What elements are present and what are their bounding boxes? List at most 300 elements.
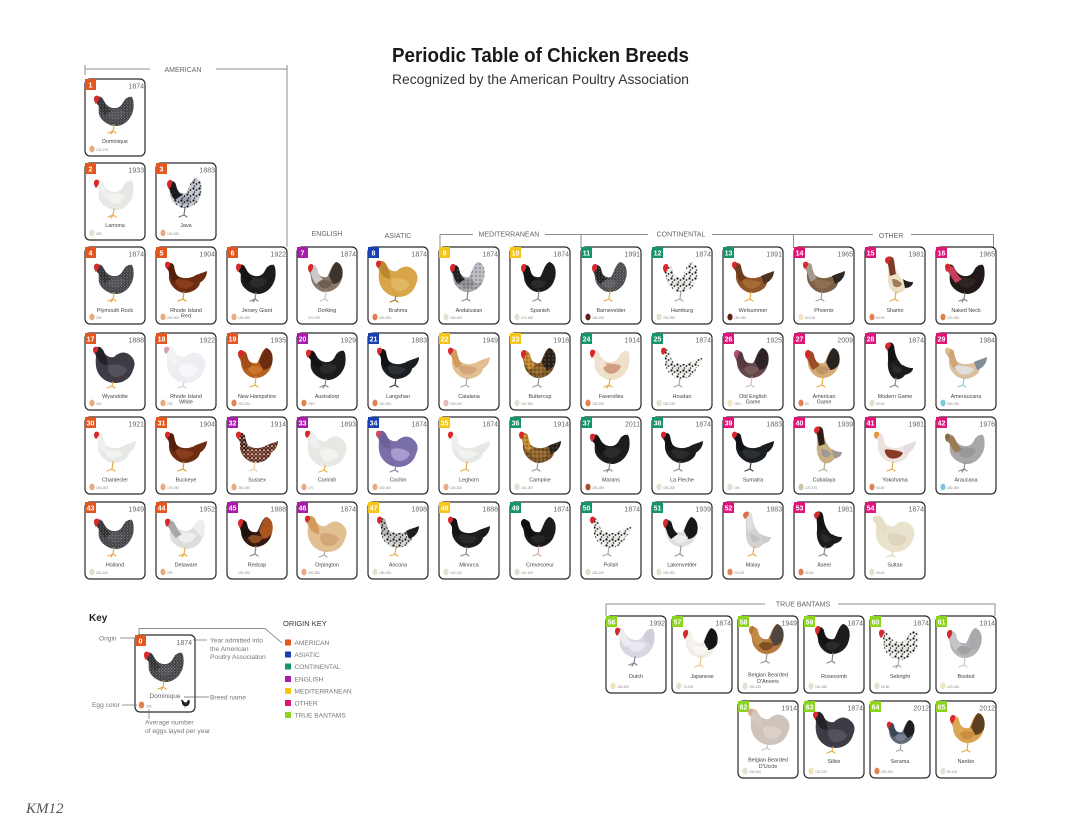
card: Rhode Island White: 18 [158,336,165,344]
card: Chantecler: 30 [87,420,94,428]
card: Wyandotte [85,333,145,410]
card: Australorp: Australorp [315,394,339,400]
card: Japanese: Japanese [690,674,714,680]
card: Malay [723,502,783,579]
egg: Araucana: 180-250 [947,486,959,490]
card: Sebright: Sebright [890,674,911,680]
card: Cornish: 33 [299,420,306,428]
key annotation: year admitted: the American [210,646,249,653]
egg: Spanish: 170-180 [521,316,533,320]
chicken: Langshan [377,348,419,387]
key annotation: breed name [184,694,246,702]
card: Ancona [368,502,428,579]
key annotation: average eggs [145,709,211,735]
card: Faverolles: 24 [583,336,590,344]
card: Lakenvelder: 51 [654,506,661,512]
card: Rhode Island White: White [179,400,193,406]
card: Jersey Giant [227,247,287,324]
key: sample card: Dominique [149,693,181,700]
chicken: Sebright [879,630,919,668]
chicken: Sumatra [732,432,774,471]
chicken: Modern Game [885,342,913,387]
card: La Fleche [652,417,712,494]
card: Modern Game: 1874 [908,338,924,344]
card: Rosecomb: 59 [806,620,813,626]
chicken: Sultan [873,516,915,557]
card: Langshan: 1883 [411,338,427,344]
origin key legend: AMERICAN [294,640,330,647]
chicken: Holland [94,519,134,557]
egg: Andalusian: 160-200 [450,316,462,320]
egg: Yokohama: 60-80 [876,486,885,490]
key annotation: average eggs: Average number [145,720,194,726]
chicken: Hamburg [663,262,698,301]
card: Redcap: 45 [229,506,236,512]
bracket: Mediterranean, Continental and Other: MEDITERRANEAN [479,232,539,238]
card: Campine: 1914 [553,422,569,428]
chicken: La Fleche [661,432,703,471]
egg: Marans: 150-200 [592,486,604,490]
egg: New Hampshire: 200-220 [238,402,250,406]
card: Dorking: 1874 [340,252,356,258]
egg: Sumatra: 100 [734,486,740,490]
chicken: Ancona [377,517,419,556]
card: Andalusian: Andalusian [456,308,482,314]
chicken: Dorking [308,262,343,301]
card: Booted: 61 [938,620,945,626]
chicken: Houdan [661,348,703,387]
egg: Leghorn: 150-320 [450,486,462,490]
egg: Modern Game: 50-80 [876,402,885,406]
egg: Sebright: 60-80 [881,685,890,689]
origin key legend: TRUE BANTAMS [294,712,346,720]
card: Sussex: Sussex [248,478,266,484]
egg: Welsummer: 160-250 [734,316,746,320]
egg: Chantecler: 150-200 [96,486,108,490]
chicken: Belgian Bearded D'Anvers [749,624,784,663]
card: Chantecler: Chantecler [102,478,128,484]
egg: Dorking: 170-190 [308,316,320,320]
origin key heading: ORIGIN KEY [283,619,327,628]
card: Japanese [672,616,732,693]
card: Cubalaya: 40 [796,420,803,428]
chicken: Buttercup [521,348,556,387]
card: Brahma: Brahma [389,308,407,314]
key annotation: egg color [92,702,137,709]
card: American Game [794,333,854,410]
chicken: Belgian Bearded D'Uccle [748,709,790,750]
card: Jersey Giant: 1922 [270,252,286,258]
card: Cubalaya [794,417,854,494]
card: Leghorn: 35 [441,420,448,428]
chicken: Leghorn [448,432,490,471]
origin key legend: MEDITERRANEAN [294,688,352,696]
egg: Rosecomb: 150-180 [815,685,827,689]
egg: Malay: 20-100 [734,571,744,575]
card: Ancona: Ancona [389,562,407,568]
card: Belgian Bearded D'Anvers: Belgian Bearded [748,672,788,678]
card: Serama [870,701,930,778]
key annotation: average eggs: of eggs layed per year [145,728,211,735]
card: La Fleche: 38 [654,420,661,428]
card: Wyandotte: 17 [87,336,94,344]
card: Catalana: Catalana [458,394,480,400]
icon: small chicken [181,700,190,708]
chicken: Marans [590,434,630,472]
card: Belgian Bearded D'Anvers: 58 [740,620,747,626]
card: Buttercup: 1918 [553,338,569,344]
card: Marans: 37 [583,420,590,428]
card: Ameraucana: Ameraucana [951,394,981,400]
card: Dutch: 56 [608,620,615,626]
card: Dorking: 7 [301,250,305,258]
card: Aseel: 53 [796,506,803,512]
card: Booted: 1914 [979,620,995,628]
card: Buckeye: 1904 [199,422,215,428]
card: Lakenvelder [652,502,712,579]
card: Belgian Bearded D'Anvers [738,616,798,693]
card: Yokohama: 41 [867,420,874,428]
card: Sebright [870,616,930,693]
card: Serama: 2012 [913,706,929,712]
card: Ameraucana: 1984 [979,338,995,344]
key annotation: origin [99,636,135,642]
card: Buckeye: 31 [158,420,165,428]
egg: Silkie: 100-120 [815,770,827,774]
card: Sultan [865,502,925,579]
key connector: origin to legend [139,628,282,643]
chicken: Lakenvelder [663,517,698,556]
key annotation: year admitted: Year admitted into [210,638,263,644]
chicken: Plymouth Rock [94,264,134,302]
chicken: Naked Neck [945,264,985,302]
egg: Naked Neck: 120-150 [947,316,959,320]
card: Marans: 2011 [625,422,640,428]
origin key legend: ASIATIC [294,652,320,659]
card: Rosecomb [804,616,864,693]
card: Silkie: Silkie [828,759,840,765]
card: Cochin: 1874 [411,422,427,428]
egg: Shamo: 80-90 [876,316,885,320]
card: Spanish: Spanish [530,308,550,314]
card: Leghorn: 1874 [482,422,498,428]
card: Andalusian: 9 [443,250,447,258]
egg: Aseel: 50-60 [805,571,814,575]
card: Sumatra: 39 [725,420,732,428]
card: Japanese: 1874 [715,620,731,628]
card: Phoenix: 1965 [837,252,853,258]
egg: Barnevelder: 180-200 [592,316,604,320]
chicken: Yokohama [874,432,916,471]
card: Belgian Bearded D'Uccle: 62 [740,704,747,712]
chicken: Welsummer [732,262,774,301]
egg: Cochin: 150-200 [379,486,391,490]
card: Chantecler: 1921 [128,422,144,428]
chicken: Silkie [813,712,855,753]
card: Shamo: 1981 [908,252,924,258]
bracket: True Bantams: TRUE BANTAMS [776,602,830,608]
card: Cornish: 1893 [340,422,356,428]
card: Ameraucana [936,333,996,410]
egg: Belgian Bearded D'Uccle: 100-200 [749,770,761,774]
card: Cubalaya: 1939 [837,422,853,428]
card: Sultan: Sultan [887,562,903,568]
card: Redcap: 1888 [270,506,286,514]
origin key legend: OTHER [294,700,318,708]
card: Marans: Marans [602,478,620,484]
card: Nankin: 2012 [979,706,995,712]
card: Phoenix: 14 [796,250,803,258]
card: Catalana: 22 [441,336,448,344]
key heading: Key [89,613,108,624]
card: Dutch: Dutch [629,674,643,680]
card: Modern Game: 28 [867,336,874,344]
card: Old English Game: 26 [725,336,732,344]
card: Ancona: 1898 [411,506,427,514]
card: Australorp: 1929 [340,338,356,344]
egg: American Game: 80 [805,402,809,406]
card: Crevecoeur: 1874 [553,506,569,514]
card: Serama: 64 [872,704,879,712]
card: American Game: 27 [796,336,803,344]
card: Delaware [156,502,216,579]
egg: Buckeye: 175-240 [167,486,179,490]
chicken: Spanish [521,262,556,301]
card: Nankin: Nankin [958,759,974,765]
card: Houdan [652,333,712,410]
egg: Cubalaya: 120-175 [805,486,817,490]
card: Araucana: Araucana [954,478,978,484]
card: Naked Neck: Naked Neck [951,308,981,314]
card: Dominique [85,79,145,156]
card: Japanese: 57 [674,620,681,626]
bracket: Mediterranean, Continental and Other: CONTINENTAL [657,232,706,238]
card: Cubalaya: Cubalaya [813,478,835,484]
subtitle: Recognized by the American Poultry Association [392,71,689,87]
egg: La Fleche: 150-200 [663,486,675,490]
card: Malay: 1883 [766,506,782,514]
chicken: Rosecomb [815,624,850,663]
card: Crevecoeur [510,502,570,579]
key annotation: year admitted [193,638,266,661]
card: Langshan [368,333,428,410]
egg: Cornish: 170 [308,486,314,490]
card: Belgian Bearded D'Uccle [738,701,798,778]
card: Delaware: 1952 [199,506,215,514]
card: Barnevelder: 1991 [624,252,640,258]
egg: Polish: 150-200 [592,571,604,575]
chicken: Dutch [615,628,655,666]
card: Nankin: 65 [938,704,945,712]
card: Rhode Island Red: 5 [160,250,164,258]
card: Aseel: 1981 [837,506,853,514]
card: Malay: Malay [746,562,760,568]
card: New Hampshire: New Hampshire [238,394,276,400]
card: Sussex: 32 [229,420,236,428]
card: Java: 1883 [199,168,215,174]
card: Plymouth Rock: Plymouth Rock [97,308,133,314]
egg: Dominique: 230-275 [96,148,108,152]
card: Buttercup [510,333,570,410]
card: Sultan: 1874 [908,506,924,514]
chicken: Minorca [448,517,490,556]
chicken: Araucana [945,434,985,472]
card: Wyandotte: 1888 [128,338,144,344]
egg: Brahma: 160-200 [379,316,391,320]
card: Marans [581,417,641,494]
egg: Belgian Bearded D'Anvers: 150-220 [749,685,761,689]
egg: Faverolles: 150-200 [592,402,604,406]
card: Rhode Island White: Rhode Island [170,394,202,400]
card: Belgian Bearded D'Uccle: D'Uccle [759,764,777,770]
card: Delaware: Delaware [175,562,197,568]
card: Cochin [368,417,428,494]
egg: Houdan: 150-230 [663,402,675,406]
card: Java [156,163,216,240]
card: Plymouth Rock: 1874 [128,252,144,258]
chicken: Wyandotte [93,347,135,388]
egg: Lakenvelder: 150-200 [663,571,675,575]
card: Holland: Holland [106,562,124,568]
card: Hamburg: 12 [654,250,661,258]
card: Plymouth Rock: 4 [89,250,93,258]
card: Polish [581,502,641,579]
card: Jersey Giant: 6 [231,250,235,258]
egg: Hamburg: 200-250 [663,316,675,320]
chicken: Australorp [306,350,346,388]
key: sample card: 1874 [176,640,192,647]
card: Cochin: 34 [370,420,377,428]
card: Orpington: Orpington [315,562,339,568]
chicken: Orpington [305,516,347,557]
egg: Buttercup: 140-180 [521,402,533,406]
egg: key sample: 200 [146,704,152,708]
bracket: American [85,65,287,247]
card: Spanish [510,247,570,324]
chicken: American Game [805,348,840,387]
card: Dominique: 1 [89,82,93,90]
card: Welsummer [723,247,783,324]
card: Araucana: 42 [938,420,945,428]
chicken: Booted [947,628,982,667]
chicken: Chantecler [94,432,136,471]
card: Yokohama: 1981 [908,422,924,428]
card: Yokohama [865,417,925,494]
egg: Sussex: 200-250 [238,486,250,490]
card: Yokohama: Yokohama [882,478,908,484]
card: Spanish: 1874 [553,252,569,258]
chicken: Serama [887,720,915,751]
chicken: Polish [590,517,632,556]
chicken: Malay [743,511,771,556]
card: Java: 3 [160,166,164,174]
card: Lamona: 1933 [128,168,144,174]
chicken: Phoenix [803,262,845,301]
card: Redcap: Redcap [248,562,266,568]
egg: Phoenix: 52-126 [805,316,815,320]
card: Rhode Island Red: Red [181,314,191,320]
card: Faverolles [581,333,641,410]
card: Plymouth Rock [85,247,145,324]
chicken: Crevecoeur [521,517,556,556]
egg: Rhode Island Red: 200-300 [167,316,179,320]
signature: KM12 [25,801,64,817]
card: Welsummer: Welsummer [739,308,768,314]
card: Malay: 52 [725,506,732,512]
card: Andalusian [439,247,499,324]
egg: Rhode Island White: 225 [167,402,173,406]
card: Crevecoeur: Crevecoeur [526,562,554,568]
card: Modern Game [865,333,925,410]
card: Lakenvelder: Lakenvelder [667,562,697,568]
egg: Delaware: 200 [167,571,173,575]
card: Serama: Serama [891,759,909,765]
card: Houdan: 25 [654,336,661,344]
origin key legend: ENGLISH [294,676,324,684]
card: Cornish [297,417,357,494]
chicken: Aseel [814,511,842,556]
chicken: Ameraucana [945,348,987,387]
card: Modern Game: Modern Game [878,394,912,400]
chicken: New Hampshire [238,348,273,387]
card: Lamona [85,163,145,240]
card: Aseel: Aseel [817,562,831,568]
card: Holland: 1949 [128,506,144,514]
card: Belgian Bearded D'Uccle: 1914 [781,706,797,712]
card: Faverolles: 1914 [624,338,640,344]
egg: Australorp: 250+ [308,402,316,406]
card: Minorca: Minorca [459,562,479,568]
chicken: Catalana [448,348,490,387]
chicken: Barnevelder [592,262,627,301]
egg: Catalana: 200-240 [450,402,462,406]
card: Redcap [227,502,287,579]
chicken: Shamo [885,256,913,301]
heading: English: ENGLISH [312,231,342,238]
card: Phoenix: Phoenix [814,308,834,314]
card: Buckeye [156,417,216,494]
card: Polish: Polish [604,562,618,568]
bracket: Mediterranean, Continental and Other: OTHER [879,233,903,240]
card: Shamo: 15 [867,250,874,258]
card: Old English Game: 1925 [766,338,782,344]
card: Sumatra: Sumatra [743,478,763,484]
egg: Dutch: 150-200 [617,685,629,689]
card: Rhode Island Red: 1904 [199,252,215,258]
card: Belgian Bearded D'Uccle: Belgian Bearded [748,758,788,764]
chicken: Campine [519,432,561,471]
chicken: Old English Game [734,348,769,387]
card: Sussex: 1914 [270,422,286,428]
chicken: Brahma [376,261,418,302]
chicken: Java [167,178,202,217]
card: Houdan: Houdan [673,394,691,400]
chicken: Rhode Island White [164,347,206,388]
card: Phoenix [794,247,854,324]
card: Aseel [794,502,854,579]
card: Orpington [297,502,357,579]
chicken: Rhode Island Red [165,262,207,301]
origin key legend [285,640,352,720]
chicken: Buckeye [165,432,207,471]
card: Rosecomb: Rosecomb [821,674,847,680]
card: Australorp: 20 [299,336,306,344]
card: Welsummer: 13 [725,250,732,258]
card: Leghorn: Leghorn [459,478,479,484]
egg: Ancona: 180-220 [379,571,391,575]
card: Houdan: 1874 [695,338,711,344]
card: Sultan: 54 [867,506,874,512]
